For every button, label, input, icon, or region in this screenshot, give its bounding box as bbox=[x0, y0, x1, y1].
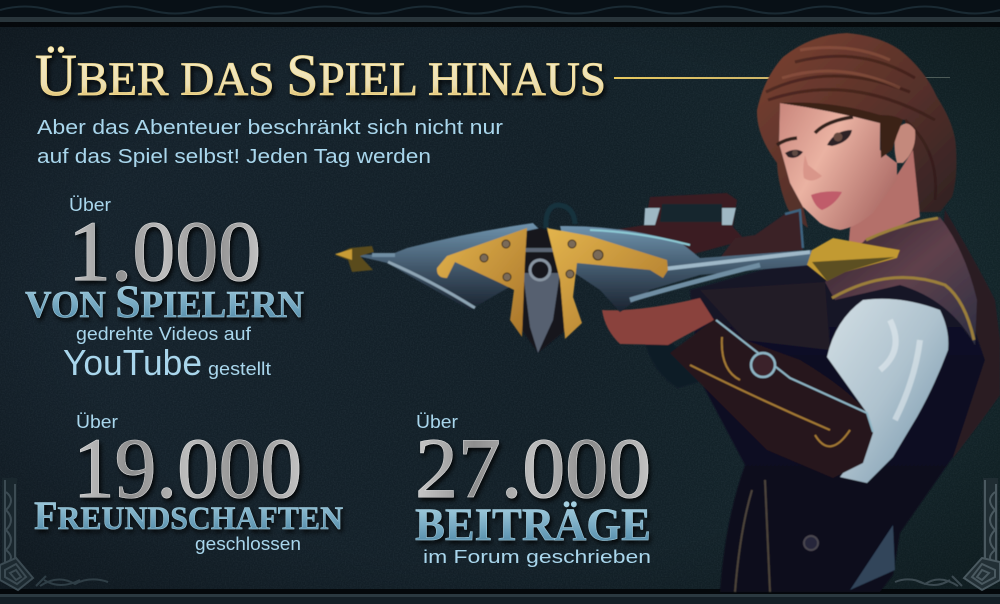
hair fringe bbox=[780, 102, 903, 158]
torso bbox=[690, 240, 985, 592]
illustration: woman bbox=[602, 33, 1000, 592]
long hair behind shoulder bbox=[935, 210, 1000, 458]
ear bbox=[894, 124, 915, 163]
stat: YouTube videos: Über bbox=[69, 195, 111, 215]
neck bbox=[848, 150, 920, 252]
right limb and rail bbox=[560, 226, 812, 312]
nose bbox=[803, 155, 822, 181]
hair bbox=[757, 33, 956, 228]
right gold plate bbox=[547, 228, 668, 339]
label: Freundschaften: FREUNDSCHAFTEN bbox=[34, 493, 343, 538]
stat: friendships: Über bbox=[76, 412, 118, 432]
center body bbox=[517, 228, 566, 353]
label: Beiträge: BEITRÄGE bbox=[415, 499, 651, 551]
left gold plate bbox=[437, 228, 527, 337]
intro text bbox=[37, 117, 503, 168]
number: 19.000: 19.000 bbox=[73, 420, 302, 516]
frame: top border bbox=[0, 0, 1000, 27]
frame: bottom border bbox=[0, 589, 1000, 604]
stat: forum posts bbox=[415, 412, 651, 567]
rear sight bbox=[546, 205, 575, 228]
arrow tip right bbox=[807, 238, 900, 281]
glove underside bbox=[645, 343, 705, 388]
bracer bbox=[670, 318, 873, 478]
rivets bbox=[480, 240, 603, 281]
arrow tip left bbox=[335, 246, 374, 272]
eyes and brows bbox=[777, 117, 853, 158]
face bbox=[779, 103, 897, 230]
ornament: bottom right corner bbox=[895, 478, 1000, 590]
riser bbox=[720, 210, 803, 258]
stat: forum posts: im Forum geschrieben bbox=[423, 547, 651, 567]
hand bbox=[602, 298, 714, 345]
left limb bbox=[353, 223, 540, 310]
vest shoulder bbox=[825, 217, 977, 345]
ornament: bottom left corner bbox=[0, 478, 108, 590]
stat: YouTube videos bbox=[25, 195, 304, 383]
stat: forum posts: Über bbox=[416, 412, 458, 432]
intro text: auf das Spiel selbst! Jeden Tag werden bbox=[37, 146, 431, 168]
label: von Spielern: VON SPIELERN bbox=[25, 276, 304, 328]
stat: friendships bbox=[34, 412, 343, 554]
lips bbox=[811, 191, 842, 210]
title: ÜBER DAS SPIEL HINAUS bbox=[35, 42, 606, 108]
stat: YouTube videos: gestellt bbox=[208, 359, 271, 379]
intro text: Aber das Abenteuer beschränkt sich nicht nur bbox=[37, 117, 503, 139]
illustration: crossbow bbox=[335, 193, 900, 353]
stock and handle bbox=[600, 193, 745, 255]
stat: friendships: geschlossen bbox=[195, 534, 301, 554]
number: 1.000: 1.000 bbox=[68, 203, 261, 299]
heading underline bbox=[614, 77, 950, 79]
stat: YouTube videos: gedrehte Videos auf bbox=[76, 324, 252, 344]
stat: YouTube videos: YouTube bbox=[63, 342, 202, 383]
number: 27.000: 27.000 bbox=[415, 420, 651, 516]
sleeve bbox=[827, 299, 948, 483]
